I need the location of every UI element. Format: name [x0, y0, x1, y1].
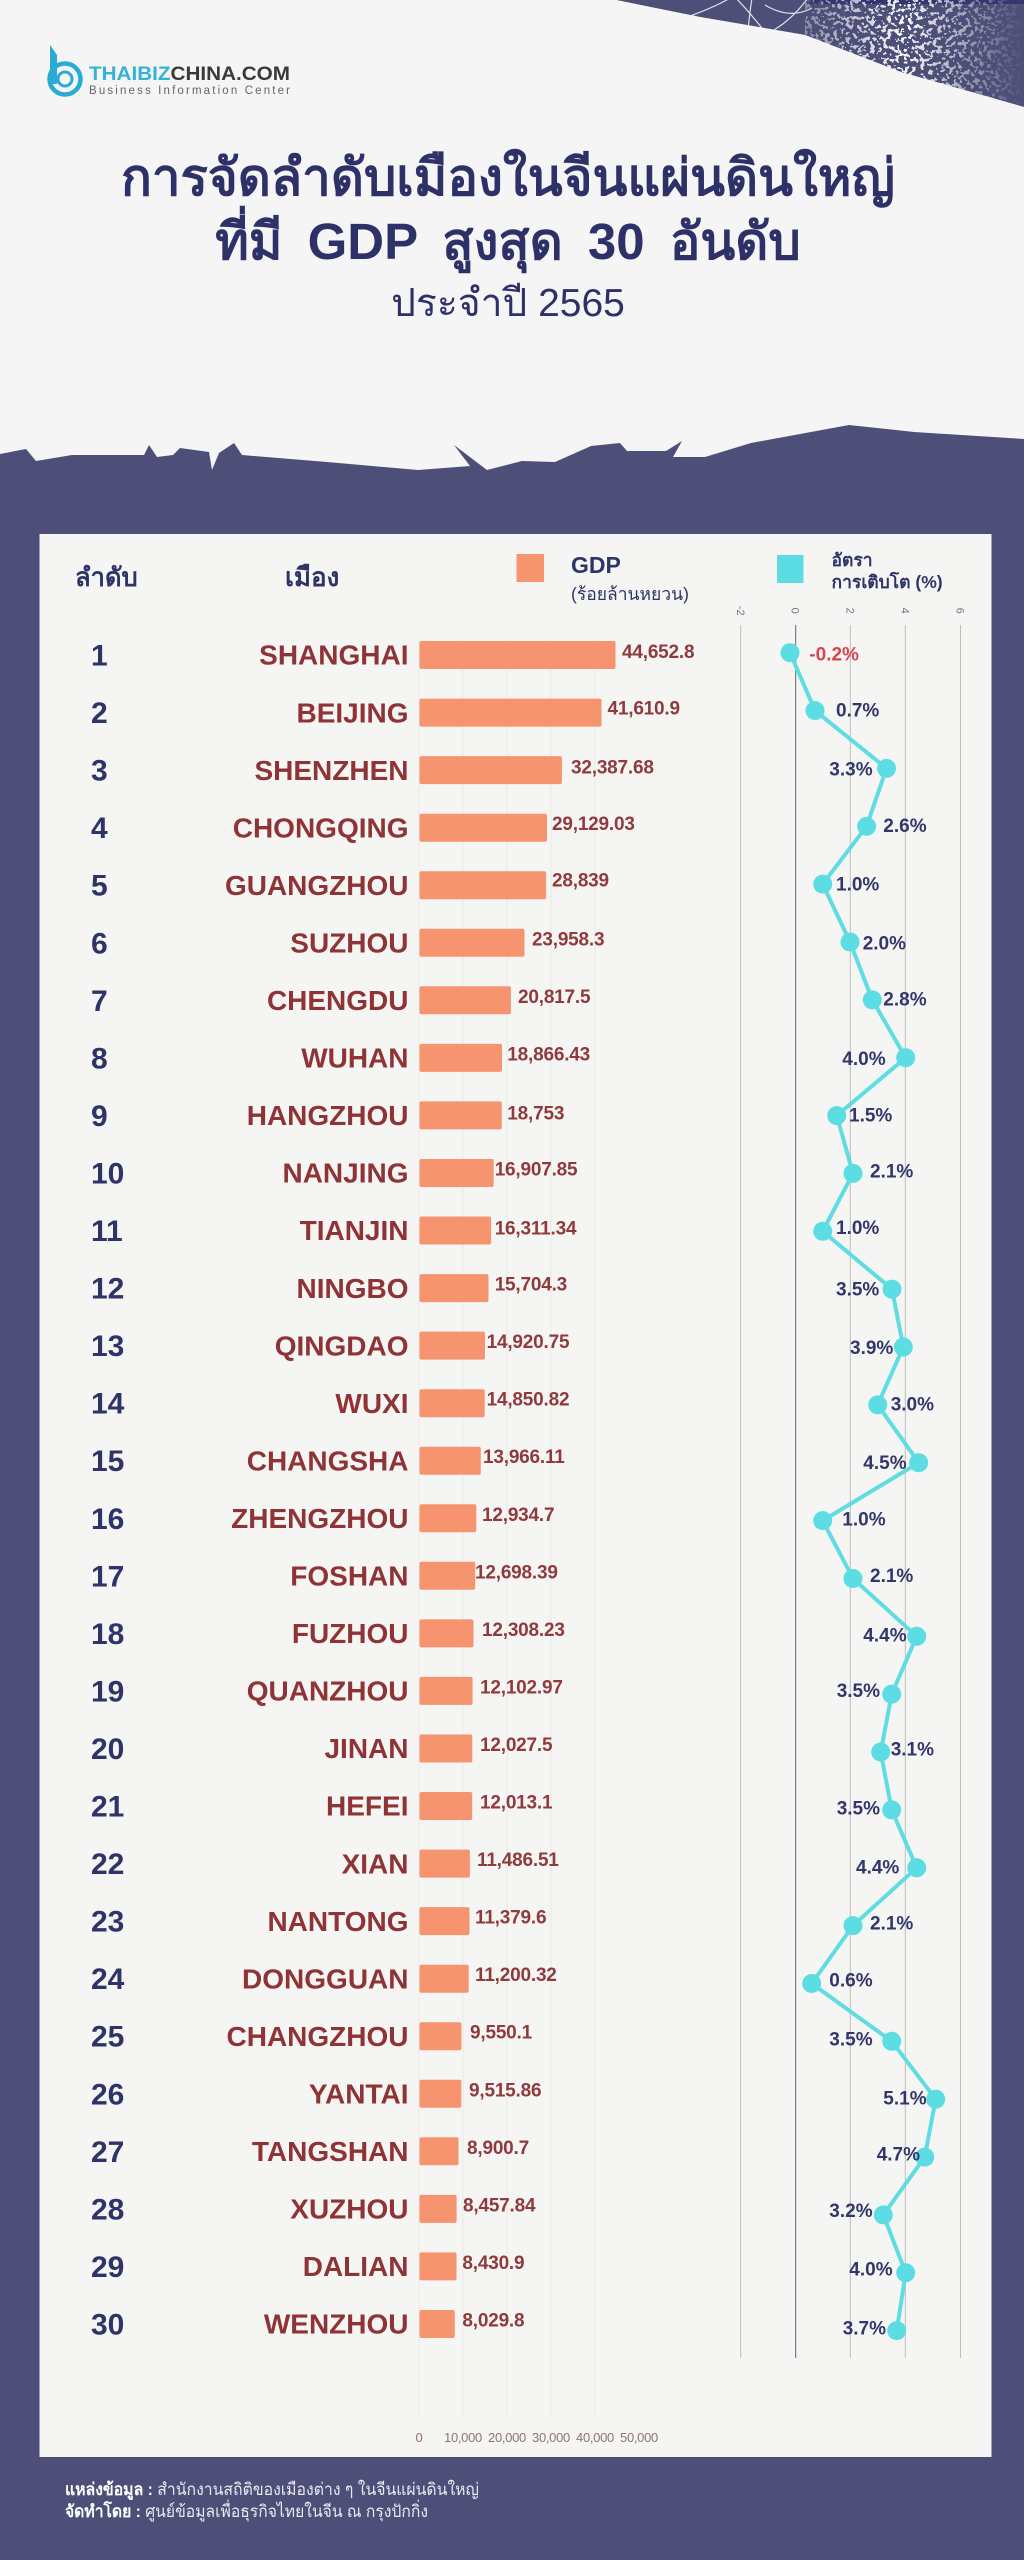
- row 20: 20: [91, 1733, 124, 1766]
- growth value labels: 3.5%: [829, 2030, 873, 2050]
- GDP axis grid: [419, 640, 595, 2417]
- row 28: 28: [91, 2193, 124, 2226]
- growth value labels: 3.3%: [829, 760, 873, 780]
- row 5: 5: [91, 870, 108, 903]
- row 7: [91, 985, 591, 1018]
- row 28: 8,457.84: [463, 2195, 536, 2216]
- growth value labels: -0.2%: [809, 644, 859, 666]
- row 9: HANGZHOU: [247, 1100, 408, 1131]
- row 7: 7: [91, 985, 108, 1018]
- row 16: 16: [91, 1503, 124, 1536]
- row 12: 15,704.3: [495, 1275, 567, 1296]
- row 26: 9,515.86: [469, 2080, 541, 2101]
- growth axis labels: 4: [898, 608, 910, 614]
- row 3: [91, 755, 654, 788]
- row 2: BEIJING: [296, 697, 408, 728]
- row 10: 16,907.85: [495, 1160, 578, 1180]
- growth value labels: 3.7%: [843, 2318, 886, 2340]
- legend: GDP: GDP: [571, 552, 621, 578]
- row 30: 8,029.8: [462, 2310, 524, 2332]
- logo: THAIBIZ CHINA.COM: [89, 64, 290, 85]
- row 14: 14: [91, 1388, 125, 1421]
- growth value labels: 1.5%: [849, 1106, 892, 1126]
- growth value labels: 0.6%: [829, 1970, 873, 1992]
- row 12: [91, 1273, 567, 1306]
- row 14: [91, 1388, 569, 1421]
- row 28: XUZHOU: [290, 2194, 408, 2225]
- row 15: [91, 1445, 565, 1478]
- legend: GDP: [516, 552, 689, 604]
- growth value labels: 3.0%: [891, 1394, 934, 1416]
- row 22: 11,486.51: [477, 1850, 559, 1871]
- growth value labels: 3.2%: [829, 2201, 873, 2222]
- row 18: 18: [91, 1618, 124, 1651]
- row 7: 20,817.5: [518, 987, 591, 1008]
- row 11: TIANJIN: [300, 1215, 408, 1246]
- growth axis labels: 2: [843, 608, 855, 614]
- row 25: [91, 2021, 533, 2054]
- row 1: 44,652.8: [622, 642, 694, 663]
- GDP axis labels: 20,000: [488, 2430, 526, 2445]
- row 20: [91, 1733, 553, 1766]
- row 9: 18,753: [507, 1103, 564, 1124]
- footer source credits: [65, 2479, 479, 2522]
- GDP axis labels: 0: [416, 2430, 423, 2445]
- row 24: [91, 1963, 557, 1996]
- row 30: 30: [91, 2308, 124, 2342]
- row 9: 9: [91, 1100, 108, 1133]
- row 28: [91, 2193, 536, 2226]
- growth value labels: 3.1%: [891, 1740, 934, 1760]
- row 24: 24: [91, 1963, 125, 1996]
- row 4: CHONGQING: [233, 812, 408, 843]
- row 29: 29: [91, 2251, 124, 2284]
- row 17: 12,698.39: [475, 1562, 558, 1583]
- GDP axis labels: [416, 2430, 658, 2445]
- row 3: 32,387.68: [571, 758, 654, 779]
- row 8: 18,866.43: [507, 1044, 590, 1065]
- row 21: [91, 1790, 553, 1824]
- row 21: 12,013.1: [480, 1792, 553, 1814]
- growth line: [790, 653, 936, 2331]
- row 8: [91, 1042, 590, 1075]
- row 1: SHANGHAI: [259, 640, 408, 671]
- growth axis labels: 0: [789, 608, 801, 614]
- growth axis grid: [741, 625, 960, 2358]
- row 23: 11,379.6: [475, 1908, 546, 1929]
- ranking rows: [91, 640, 694, 2342]
- row 15: 13,966.11: [483, 1447, 565, 1468]
- title: การจัดลำดับเมืองในจีนแผ่นดินใหญ่: [121, 148, 895, 207]
- row 30: WENZHOU: [264, 2309, 408, 2340]
- row 5: GUANGZHOU: [225, 870, 408, 901]
- row 13: 13: [91, 1330, 124, 1363]
- row 13: [91, 1330, 570, 1363]
- legend: growth rate: อัตรา: [832, 550, 873, 570]
- growth value labels: 3.9%: [850, 1338, 893, 1359]
- row 6: 6: [91, 927, 108, 960]
- row 5: [91, 870, 609, 903]
- growth value labels: 4.0%: [849, 2260, 893, 2280]
- row 27: 27: [91, 2136, 124, 2169]
- growth value labels: 2.1%: [870, 1162, 913, 1182]
- row 16: ZHENGZHOU: [231, 1503, 408, 1534]
- growth value labels: 2.1%: [870, 1566, 913, 1587]
- row 1: [91, 640, 694, 672]
- growth value labels: 2.0%: [863, 934, 906, 954]
- row 6: [91, 927, 604, 960]
- row 2: 2: [91, 697, 108, 730]
- logo: [50, 45, 290, 97]
- GDP axis labels: 50,000: [620, 2430, 658, 2445]
- row 10: [91, 1158, 578, 1190]
- row 1: 1: [91, 640, 108, 672]
- GDP axis labels: 40,000: [576, 2430, 614, 2445]
- row 11: 11: [91, 1215, 123, 1248]
- legend: GDP: (ร้อยล้านหยวน): [571, 584, 689, 604]
- title: ประจำปี 2565: [391, 282, 625, 325]
- row 29: DALIAN: [303, 2251, 408, 2282]
- row 15: 15: [91, 1445, 124, 1478]
- row 27: TANGSHAN: [252, 2136, 408, 2167]
- row 5: 28,839: [552, 871, 609, 892]
- legend: growth rate: [777, 550, 943, 592]
- row 21: HEFEI: [326, 1791, 408, 1822]
- header: rank: ลำดับ: [75, 564, 138, 592]
- row 21: 21: [91, 1790, 124, 1824]
- row 11: 16,311.34: [495, 1218, 577, 1240]
- growth value labels: 1.0%: [836, 874, 879, 896]
- row 12: NINGBO: [296, 1273, 408, 1304]
- GDP axis labels: 10,000: [444, 2430, 482, 2445]
- row 23: NANTONG: [267, 1906, 408, 1937]
- row 4: 4: [91, 812, 108, 845]
- growth value labels: 4.4%: [856, 1858, 899, 1878]
- row 26: 26: [91, 2078, 124, 2111]
- row 17: [91, 1560, 558, 1593]
- top right torn corner decoration: [616, 0, 1024, 110]
- growth value labels: 1.0%: [836, 1218, 879, 1239]
- row 7: CHENGDU: [267, 985, 408, 1016]
- row 11: [91, 1215, 577, 1248]
- row 17: 17: [91, 1560, 124, 1593]
- title: [121, 148, 895, 325]
- row 15: CHANGSHA: [247, 1445, 408, 1476]
- growth axis labels: [734, 606, 966, 616]
- growth value labels: 4.7%: [877, 2144, 920, 2166]
- row 9: [91, 1100, 564, 1133]
- growth axis labels: 6: [954, 608, 966, 614]
- row 26: [91, 2078, 541, 2111]
- row 22: [91, 1848, 559, 1881]
- row 3: SHENZHEN: [254, 755, 408, 786]
- row 8: WUHAN: [301, 1043, 408, 1074]
- title: ที่มี GDP สูงสุด 30 อันดับ: [215, 206, 801, 274]
- row 17: FOSHAN: [290, 1561, 408, 1592]
- growth value labels: 2.8%: [883, 990, 927, 1010]
- row 12: 12: [91, 1273, 124, 1306]
- row 25: 25: [91, 2021, 124, 2054]
- panel: ranking table: [40, 534, 992, 2457]
- row 24: 11,200.32: [475, 1965, 557, 1986]
- row 20: 12,027.5: [480, 1735, 553, 1756]
- row 19: QUANZHOU: [247, 1676, 408, 1707]
- row 19: 19: [91, 1675, 124, 1708]
- growth value labels: 3.5%: [837, 1681, 880, 1702]
- row 18: 12,308.23: [482, 1620, 565, 1641]
- row 16: 12,934.7: [482, 1505, 554, 1526]
- GDP axis labels: 30,000: [532, 2430, 570, 2445]
- growth value labels: 3.5%: [837, 1798, 880, 1820]
- row 25: CHANGZHOU: [226, 2021, 408, 2052]
- legend: growth rate: การเติบโต (%): [832, 571, 943, 592]
- row 23: [91, 1906, 546, 1939]
- growth value labels: 2.6%: [883, 816, 927, 837]
- row 19: [91, 1675, 563, 1708]
- growth rate line chart: [780, 643, 945, 2340]
- row 22: XIAN: [342, 1848, 408, 1879]
- growth value labels: 1.0%: [842, 1510, 886, 1530]
- header: city: เมือง: [285, 562, 339, 592]
- row 29: [91, 2251, 524, 2284]
- growth value labels: 0.7%: [836, 700, 879, 722]
- row 22: 22: [91, 1848, 124, 1881]
- growth dots: [780, 643, 945, 2340]
- row 23: 23: [91, 1906, 124, 1939]
- row 25: 9,550.1: [470, 2023, 533, 2044]
- logo: Business Information Center: [89, 85, 290, 97]
- row 2: 41,610.9: [608, 699, 680, 720]
- row 10: NANJING: [282, 1158, 408, 1189]
- row 27: 8,900.7: [467, 2138, 529, 2159]
- row 20: JINAN: [324, 1733, 408, 1764]
- row 13: QINGDAO: [275, 1330, 408, 1361]
- growth axis labels: -2: [734, 606, 746, 616]
- row 4: 29,129.03: [552, 814, 635, 835]
- growth value labels: 4.5%: [863, 1453, 907, 1474]
- growth value labels: [809, 644, 934, 2340]
- row 6: SUZHOU: [290, 927, 408, 958]
- row 29: 8,430.9: [462, 2253, 524, 2274]
- row 13: 14,920.75: [487, 1332, 570, 1353]
- row 26: YANTAI: [309, 2079, 408, 2110]
- row 14: WUXI: [335, 1388, 408, 1419]
- row 18: [91, 1618, 565, 1651]
- growth value labels: 4.0%: [842, 1049, 886, 1070]
- row 30: [91, 2308, 524, 2342]
- row 19: 12,102.97: [480, 1677, 563, 1698]
- row 4: [91, 812, 635, 845]
- row 6: 23,958.3: [532, 929, 604, 950]
- row 24: DONGGUAN: [242, 1963, 408, 1994]
- row 2: [91, 697, 680, 730]
- growth value labels: 5.1%: [883, 2088, 927, 2110]
- growth value labels: 4.4%: [863, 1626, 907, 1646]
- growth value labels: 2.1%: [870, 1914, 913, 1934]
- row 10: 10: [91, 1158, 124, 1190]
- row 8: 8: [91, 1042, 108, 1075]
- row 16: [91, 1503, 554, 1536]
- row 18: FUZHOU: [292, 1618, 408, 1649]
- footer source credits: แหล่งข้อมูล : สำนักงานสถิติของเมืองต่าง ๆ ในจีนแผ่นดินใหญ่: [65, 2479, 479, 2501]
- growth value labels: 3.5%: [836, 1280, 879, 1300]
- footer source credits: จัดทำโดย : ศูนย์ข้อมูลเพื่อธุรกิจไทยในจีน ณ กรุงปักกิ่ง: [65, 2499, 428, 2522]
- row 14: 14,850.82: [487, 1390, 569, 1411]
- row 27: [91, 2136, 529, 2169]
- row 3: 3: [91, 755, 108, 788]
